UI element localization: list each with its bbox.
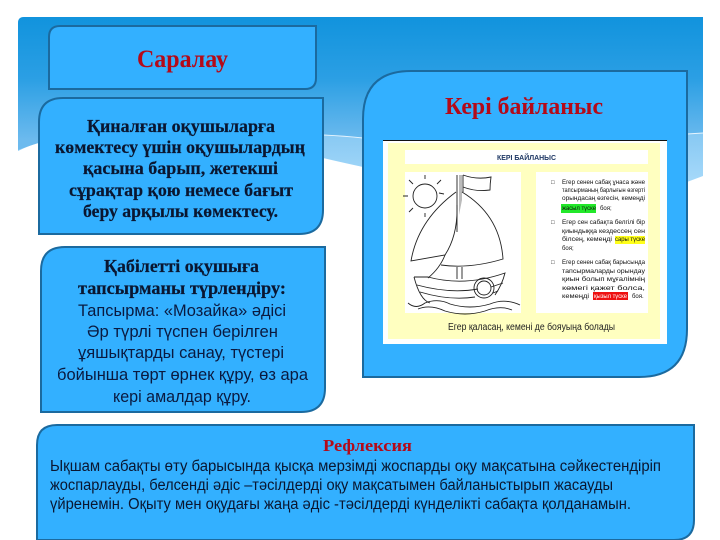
text block: colour instructions: тапсырмаларды орындау [562, 269, 645, 275]
header background with swoosh [18, 17, 703, 190]
text block: task for able students: Қабілетті оқушыға [104, 256, 259, 276]
title: Саралау: Саралау [137, 46, 228, 73]
text block: reflection paragraph: үйренемін. Оқыту мен оқудағы жаңа әдіс -тәсілдерді күнделікті сабақта қолданамын. [50, 496, 631, 513]
text block: colour instructions: қиын болып мұғалімнің [562, 277, 646, 283]
text block: colour instructions: боя; [600, 206, 612, 212]
text block: support for struggling students: қасына барып, жетекші [83, 158, 278, 178]
text block: colour instructions: Егер сен сабақта белгілі бір [562, 220, 646, 226]
text block: support for struggling students: Қиналған оқушыларға [87, 116, 275, 136]
text block: colour instructions: қызыл түске [594, 294, 628, 300]
text block: colour instructions: орындасаң өзгесін, кемеңді [562, 196, 645, 202]
text block: task for able students: ұяшықтарды санау, түстері [78, 343, 284, 362]
text block: colour instructions: кемеңді [562, 294, 589, 300]
panel: able students [41, 247, 325, 412]
text block: support for struggling students: сұрақтар қою немесе бағыт [69, 180, 293, 200]
text block: support for struggling students: беру арқылы көмектесу. [83, 201, 278, 221]
text block: task for able students [57, 256, 309, 406]
text block: reflection paragraph: жоспарлауды, белсенді әдіс –тәсілдерді оқу мақсатымен байланыстырып жасауды [50, 477, 613, 494]
text block: colour instructions: □ [551, 220, 555, 226]
heading: Рефлексия: Рефлексия [323, 436, 412, 455]
worksheet header: КЕРІ БАЙЛАНЫС [497, 153, 556, 162]
text block: colour instructions: Егер сенен сабақ барысында [562, 260, 646, 266]
heading: Кері байланыс: Кері байланыс [445, 94, 603, 120]
text block: task for able students: тапсырманы түрлендіру: [78, 278, 286, 298]
panel: Саралау heading [49, 26, 316, 89]
text block: colour instructions: қиындыққа кездессең сен [562, 229, 645, 235]
text block: colour instructions: тапсырманың барлығын өзгерті [562, 188, 645, 194]
text block: support for struggling students [55, 116, 305, 221]
text block: colour instructions: сары түске [615, 237, 646, 243]
worksheet image [383, 140, 667, 344]
icon: sailboat colouring drawing [403, 175, 520, 314]
text block: colour instructions: білсең, кемеңді [562, 237, 612, 243]
text block: colour instructions [551, 180, 646, 300]
panel: struggling students [39, 98, 323, 234]
text block: colour instructions: □ [551, 180, 555, 186]
text block: colour instructions: жасыл түске [562, 206, 597, 212]
text block: support for struggling students: көмектесу үшін оқушылардың [55, 137, 305, 157]
text block: colour instructions: Егер сенен сабақ ұнаса және [562, 180, 646, 186]
text block: colour instructions: боя; [562, 246, 574, 252]
worksheet header [405, 150, 648, 164]
text block: reflection paragraph: Ықшам сабақты өту барысында қысқа мерзімді жоспарды оқу мақсатына сәйкестендіріп [50, 458, 661, 475]
text block: colour instructions: боя. [632, 294, 644, 300]
panel: feedback [363, 71, 687, 377]
worksheet caption: Егер қаласаң, кемені де бояуыңа болады [448, 321, 615, 333]
text block: task for able students: Әр түрлі түспен берілген [87, 322, 278, 341]
text block: task for able students: кері амалдар құру. [113, 387, 251, 406]
text block: task for able students: бойынша төрт өрнек құру, өз ара [57, 365, 309, 384]
text block: reflection paragraph [50, 458, 661, 513]
text block: colour instructions: □ [551, 260, 555, 266]
text block: task for able students: Тапсырма: «Мозайка» әдісі [78, 301, 286, 320]
text block: colour instructions: көмегі қажет болса, [562, 286, 645, 292]
panel: reflection [37, 425, 694, 540]
